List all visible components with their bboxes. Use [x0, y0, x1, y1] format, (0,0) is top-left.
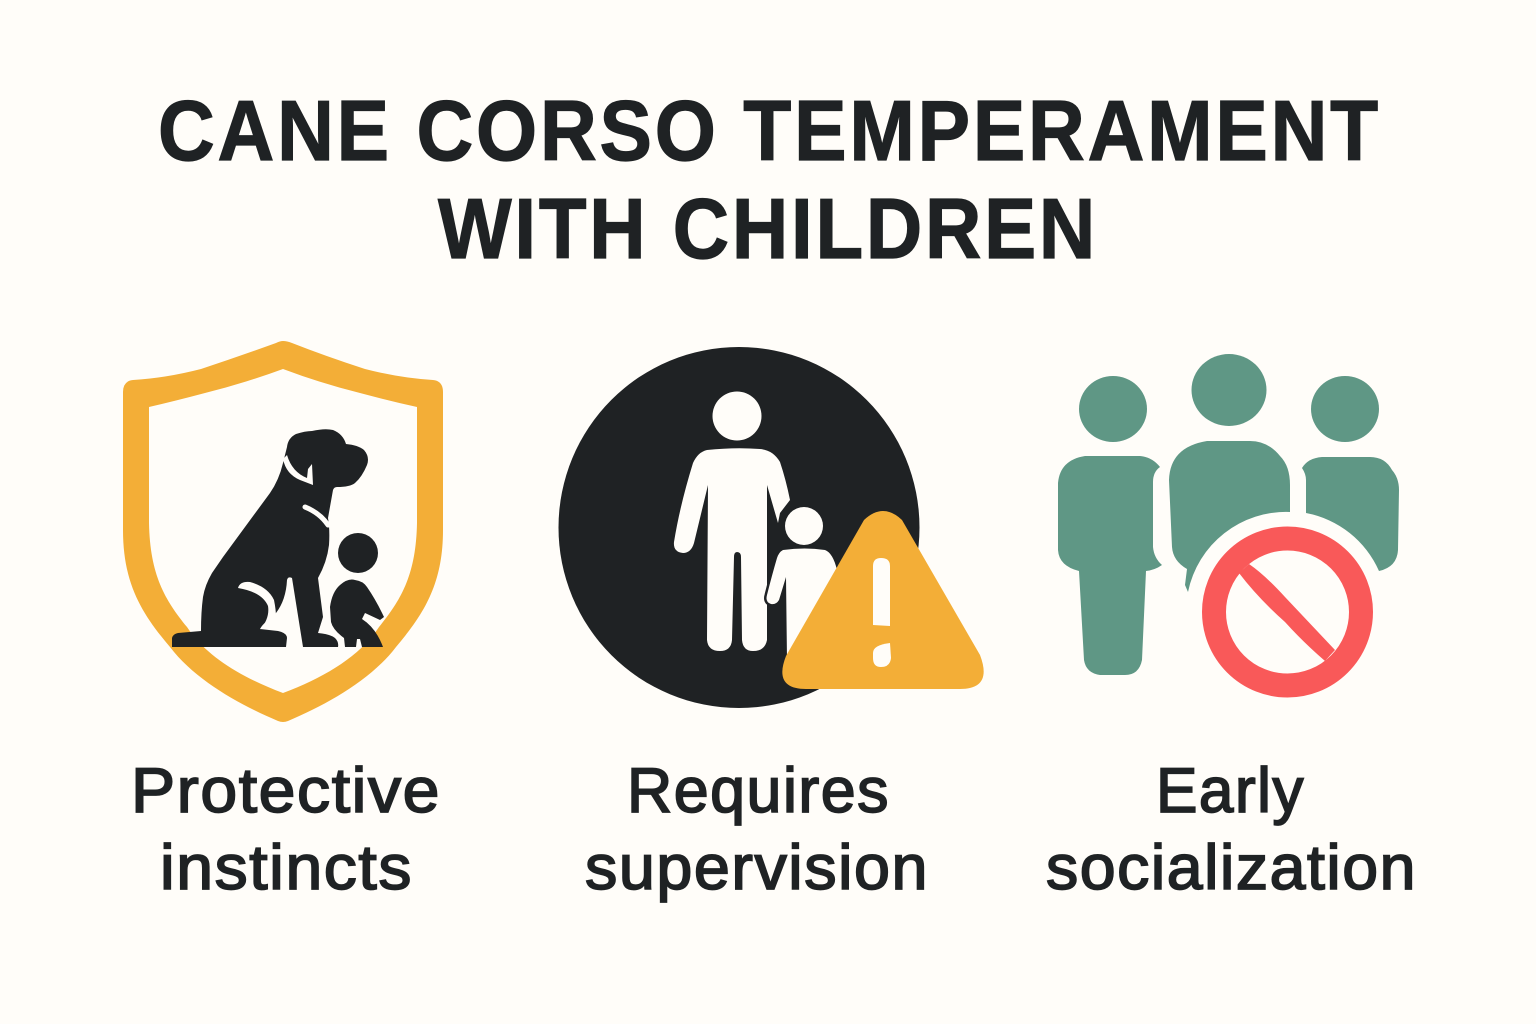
warning triangle — [782, 511, 984, 689]
person centre — [1169, 354, 1290, 592]
dark circle — [558, 347, 920, 708]
dog ear highlight — [283, 455, 313, 485]
dog chest highlight — [305, 507, 328, 525]
label: requires supervision — [585, 756, 929, 903]
title: CANE CORSO TEMPERAMENT — [158, 84, 1381, 179]
adult body — [674, 448, 790, 651]
label: protective instincts: Protective — [131, 756, 441, 826]
shield outline — [123, 341, 443, 722]
icon: adult and child with warning — [558, 347, 984, 708]
icon: group with prohibition sign — [1058, 354, 1399, 686]
panel: protective instincts — [123, 341, 443, 903]
label: early socialization — [1046, 756, 1417, 903]
title: WITH CHILDREN — [438, 182, 1098, 277]
child silhouette — [330, 533, 384, 647]
label: protective instincts — [131, 756, 441, 903]
label: protective instincts: instincts — [160, 833, 413, 903]
adult head — [712, 392, 762, 440]
panel: early socialization — [1046, 354, 1417, 903]
dog haunch highlight — [238, 582, 276, 630]
person right — [1302, 376, 1399, 571]
prohibition sign — [1214, 538, 1361, 686]
title — [158, 84, 1381, 277]
child head — [785, 507, 823, 545]
panel: requires supervision — [558, 347, 984, 903]
label: early socialization: socialization — [1046, 833, 1417, 903]
dog silhouette — [172, 429, 368, 647]
person left — [1058, 376, 1162, 675]
label: requires supervision: supervision — [585, 833, 929, 903]
label: requires supervision: Requires — [627, 756, 890, 826]
label: early socialization: Early — [1156, 756, 1305, 826]
child body — [766, 548, 850, 660]
icon: shield with dog and child — [123, 341, 443, 722]
exclamation mark — [873, 558, 890, 626]
